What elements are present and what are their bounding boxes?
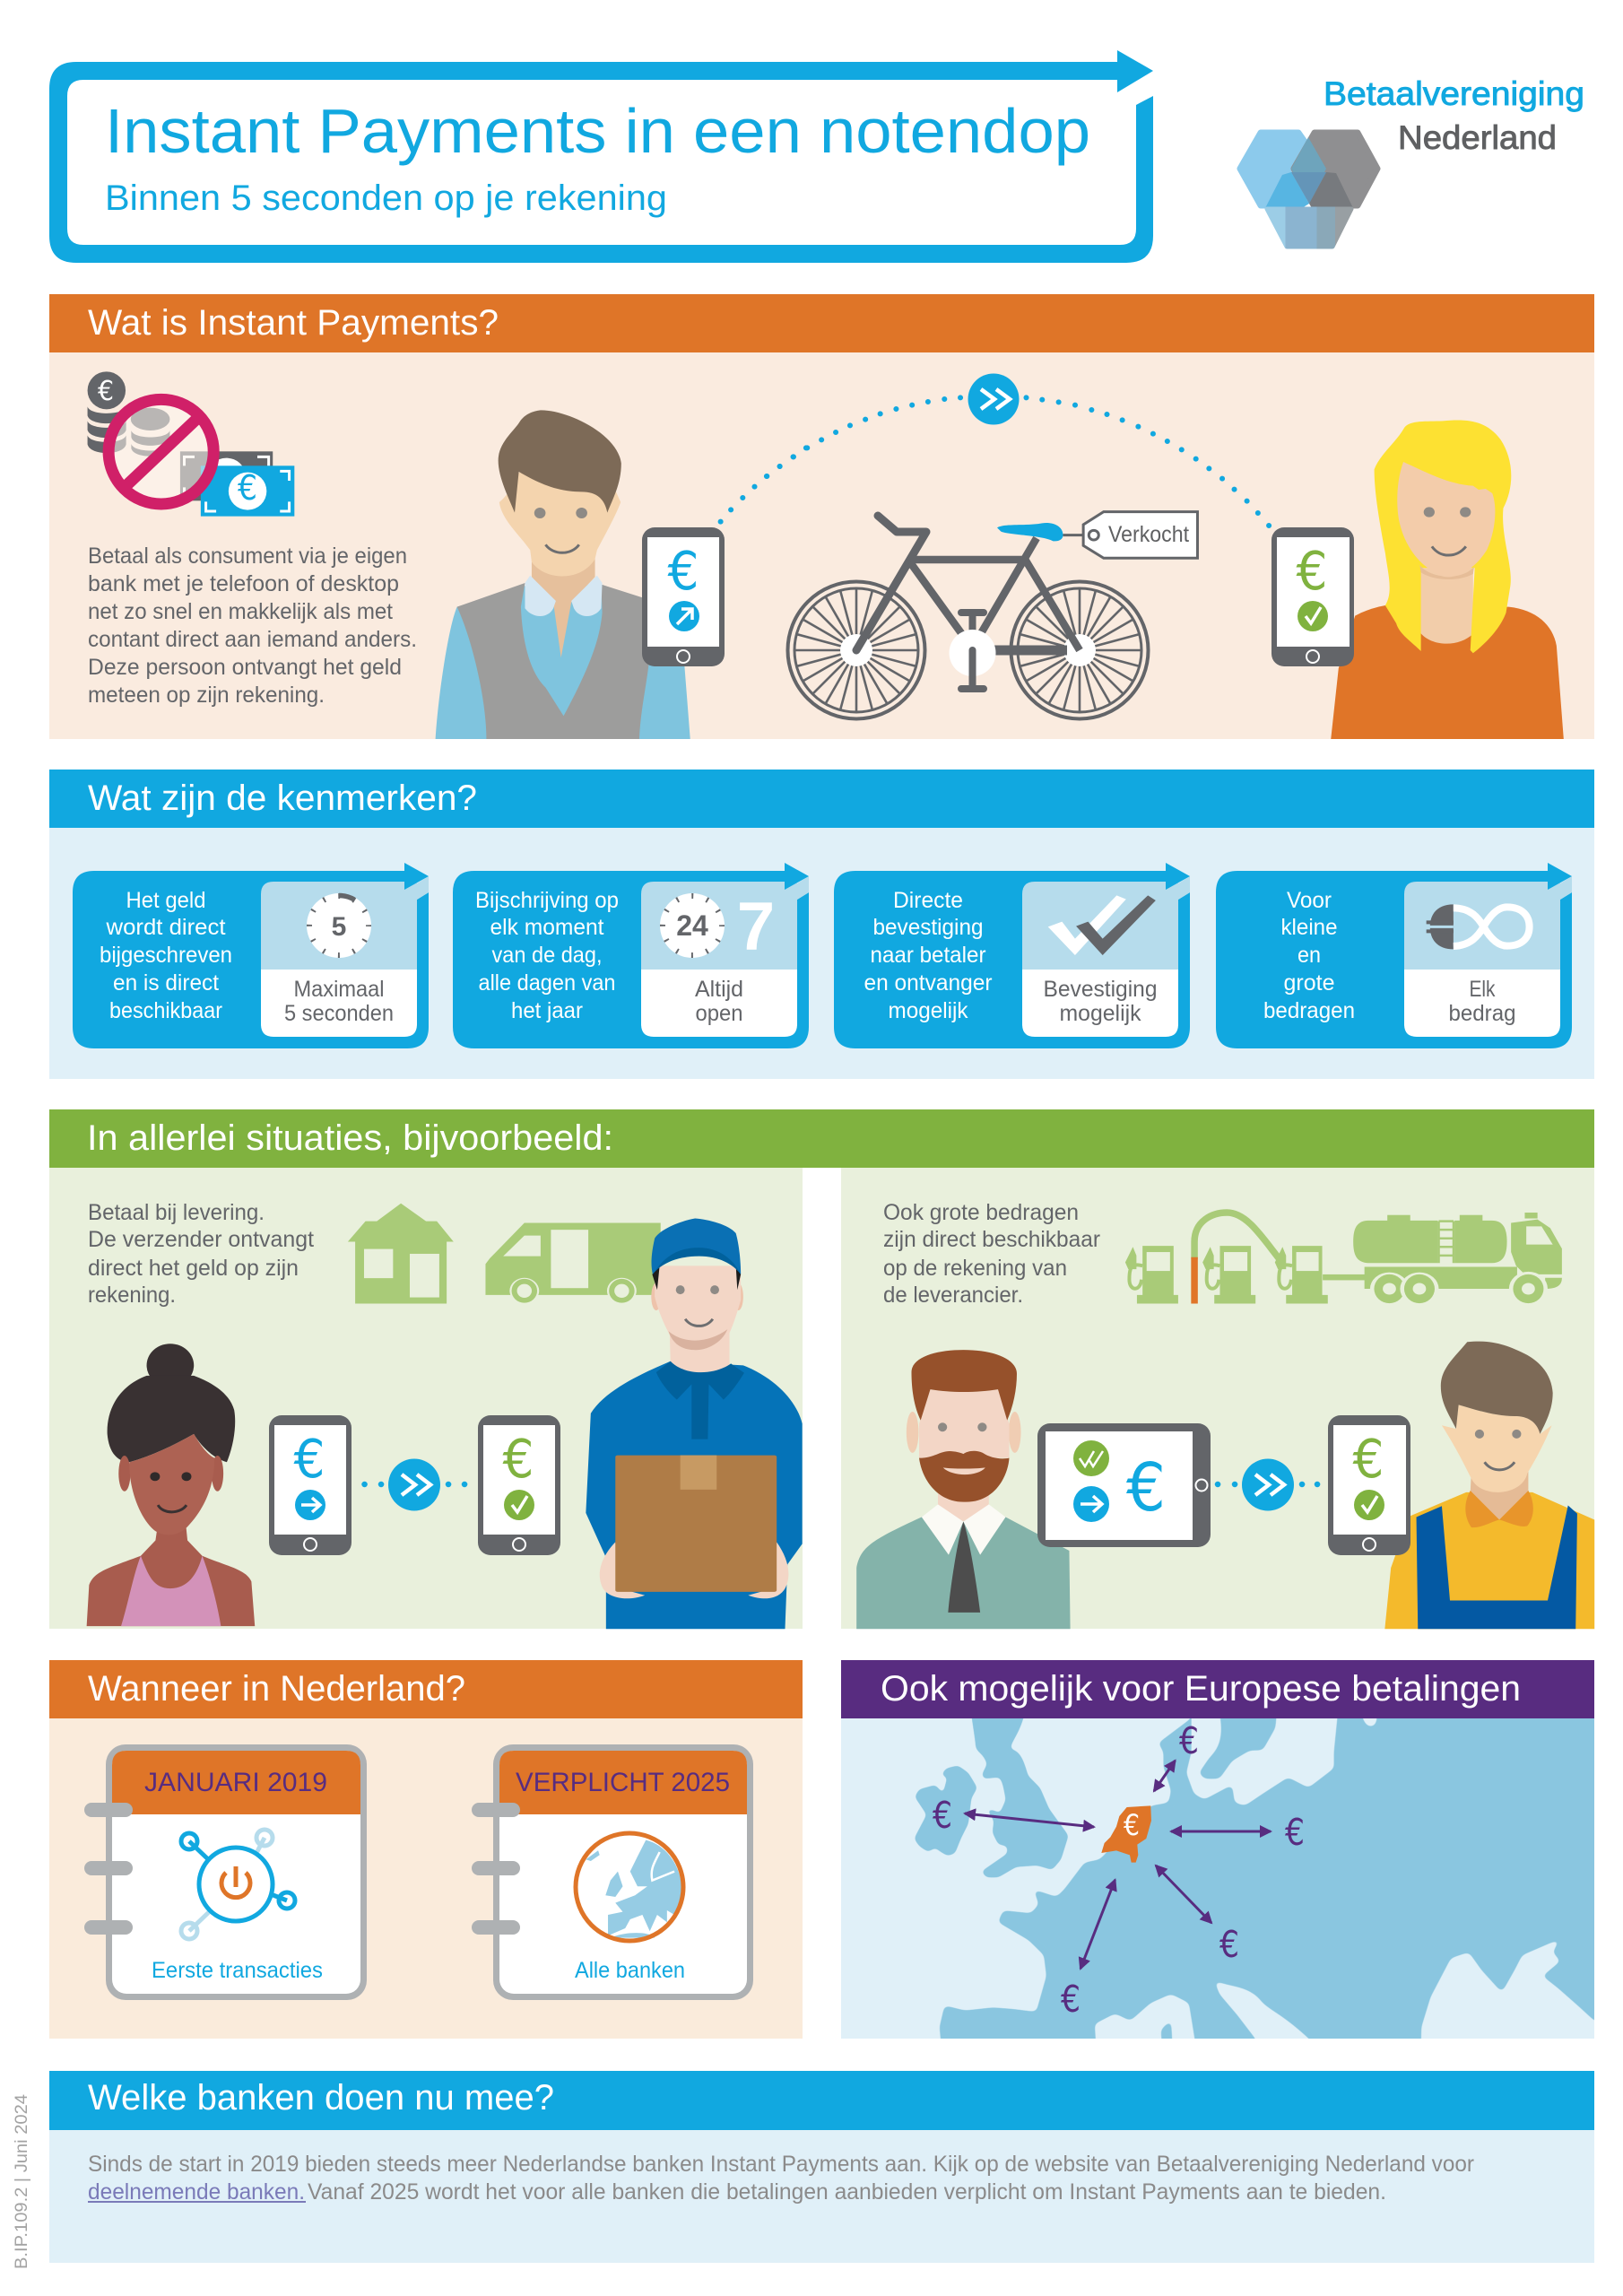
text block: levering: De verzender ontvangt [88,1227,314,1252]
text block: banks: deelnemende banken. [88,2179,305,2205]
card: altijd open: elk moment [490,915,604,940]
panel: betaal bij levering [49,1168,803,1629]
text block: intro: bank met je telefoon of desktop [88,571,399,596]
title banner [49,50,1153,263]
phone: customer [269,1415,352,1555]
heading: In allerlei situaties [49,1109,1594,1168]
card: elk bedrag: kleine [1280,915,1338,940]
card: altijd open: open [696,1001,742,1026]
text block: grote bedragen: zijn direct beschikbaar [883,1227,1100,1252]
phone: receiver: € [1297,540,1327,602]
card: bevestiging mogelijk: en ontvanger [864,970,992,996]
text block: intro: Deze persoon ontvangt het geld [88,655,402,680]
panel: grote bedragen [841,1168,1594,1629]
icon: fuel pumps [1125,1213,1328,1303]
euro symbols on map [933,1719,1305,2021]
card: elk bedrag: grote [1284,970,1334,996]
icon: power network [181,1830,295,1939]
phone: sender [642,527,725,666]
phone: worker [1328,1415,1410,1555]
heading [49,294,1594,352]
card: elk bedrag: bedragen [1263,998,1355,1023]
icon: clock 24/7 [660,889,775,965]
card: bevestiging mogelijk: Directe [893,888,963,913]
icon: no cash: € [238,468,257,508]
title: Instant Payments in een notendop [105,96,1090,166]
heading: Wanneer in Nederland? [88,1669,465,1709]
heading: In allerlei situaties: In allerlei situaties, bijvoorbeeld: [87,1118,613,1158]
card: altijd open [453,863,809,1048]
heading: Welke banken doen nu mee? [88,2078,554,2118]
card: bevestiging mogelijk: mogelijk [1060,1001,1141,1026]
card: altijd open: Bijschrijving op [475,888,619,913]
card: maximaal 5 seconden: wordt direct [105,915,226,940]
price tag [1063,512,1197,558]
panel: Europese betalingen [841,1660,1594,2039]
card: altijd open: van de dag, [491,943,603,968]
card: maximaal 5 seconden: 5 seconden [284,1001,394,1026]
text block: intro: contant direct aan iemand anders. [88,627,417,652]
document reference: B.IP.109.2 | Juni 2024 [13,2094,31,2269]
card: elk bedrag: Elk [1469,977,1496,1002]
arrow: transfer [364,1458,464,1510]
text block: levering: rekening. [88,1283,176,1308]
phone: worker: € [1352,1428,1384,1490]
figure: woman [1331,421,1564,739]
icon: van [485,1223,661,1304]
card: elk bedrag: Voor [1287,888,1332,913]
text block: banks [88,2152,1474,2205]
text block: grote bedragen: Ook grote bedragen [883,1200,1079,1225]
calendar: verplicht 2025 [472,1744,753,2000]
price tag: Verkocht [1108,522,1189,547]
text block: levering [88,1200,314,1308]
panel: Welke banken doen nu mee [49,2071,1594,2263]
text block: grote bedragen: op de rekening van [883,1256,1067,1281]
heading [49,770,1594,828]
icon: bicycle [787,512,1197,719]
icon: house [348,1204,454,1303]
heading: Wat zijn de kenmerken? [88,778,477,818]
card: maximaal 5 seconden: Maximaal [294,977,384,1002]
icon: double check [1048,895,1156,955]
card: maximaal 5 seconden: Het geld [126,888,206,913]
text block: grote bedragen: de leverancier. [883,1283,1023,1308]
euro symbols on map: € [1179,1719,1199,1762]
text block: intro [88,544,417,708]
card: bevestiging mogelijk [834,863,1190,1048]
icon: no cash [88,371,294,517]
text block: banks: Vanaf 2025 wordt het voor alle banken die betalingen aanbieden verplicht om Instant Payments aan te bieden. [308,2179,1386,2205]
icon: clock 24/7: 24 [676,909,708,942]
phone: sender: € [667,540,699,602]
phone: receiver [1271,527,1354,666]
heading [49,1660,803,1718]
arrows: payments from the Netherlands [965,1761,1271,1969]
phone: customer: € [294,1428,325,1490]
euro symbols on map: € [933,1794,952,1837]
icon: timer 5: 5 [332,912,346,942]
icon: euro infinity [1427,904,1530,949]
card: bevestiging mogelijk: Bevestiging [1044,977,1157,1002]
card: bevestiging mogelijk: mogelijk [888,998,968,1023]
text block: grote bedragen [883,1200,1100,1308]
euro symbols on map: € [1124,1808,1140,1842]
heading: Ook mogelijk voor Europese betalingen [881,1669,1521,1709]
text block: intro: Betaal als consument via je eigen [88,544,407,569]
euro symbols on map: € [1061,1978,1081,2021]
phone: courier: € [502,1428,534,1490]
icon: timer 5 [307,893,371,958]
text block: intro: meteen op zijn rekening. [88,683,325,708]
card: elk bedrag: en [1298,943,1321,968]
card: bevestiging mogelijk: bevestiging [873,915,983,940]
heading: Wat is Instant Payments? [88,303,499,343]
tablet: payer: € [1126,1449,1166,1526]
heading [49,2071,1594,2130]
panel background [49,828,1594,1079]
phone: courier [478,1415,560,1555]
calendar: verplicht 2025: Alle banken [575,1958,685,1983]
logo: Betaalvereniging Nederland: Betaalvereniging [1324,75,1584,112]
card: altijd open: Altijd [695,977,743,1002]
card: elk bedrag [1216,863,1572,1048]
text block: levering: Betaal bij levering. [88,1200,265,1225]
tablet: payer [1037,1423,1211,1547]
figure: delivery man [586,1219,803,1629]
text block: intro: net zo snel en makkelijk als met [88,599,393,624]
figure: woman with bun [87,1344,255,1626]
logo: Betaalvereniging Nederland [1240,75,1584,247]
figure: bearded man [856,1350,1071,1629]
icon: clock 24/7: 7 [737,889,775,965]
package [615,1456,777,1592]
calendar: januari 2019: JANUARI 2019 [144,1768,327,1797]
calendar: januari 2019: Eerste transacties [152,1958,323,1983]
subtitle: Binnen 5 seconden op je rekening [105,178,667,218]
card: maximaal 5 seconden: en is direct [113,970,219,996]
text block: banks: Sinds de start in 2019 bieden steeds meer Nederlandse banken Instant Payments aan. Kijk op de website van Betaalvereniging Nederland voor [88,2152,1474,2177]
card: altijd open: het jaar [511,998,583,1023]
panel: Wat is Instant Payments [49,294,1594,739]
logo: Betaalvereniging Nederland: Nederland [1398,119,1557,156]
card: altijd open: alle dagen van [479,970,615,996]
heading [841,1660,1594,1718]
card: elk bedrag: bedrag [1449,1001,1515,1026]
icon: no cash: € [98,376,114,407]
card: maximaal 5 seconden [73,863,429,1048]
euro symbols on map: € [1219,1923,1239,1966]
map: Great Britain and Ireland [914,1707,1151,1877]
panel background [49,352,1594,739]
card: maximaal 5 seconden: bijgeschreven [100,943,232,968]
map: Europe [841,1718,1594,2039]
arrow: dotted arc [721,373,1269,526]
euro symbols on map: € [1285,1811,1305,1854]
figure: worker [1384,1342,1594,1629]
card: maximaal 5 seconden: beschikbaar [109,998,222,1023]
panel: Wanneer in Nederland [49,1660,803,2039]
icon: Europe globe [576,1833,683,1941]
text block: levering: direct het geld op zijn [88,1256,299,1281]
card: bevestiging mogelijk: naar betaler [870,943,986,968]
icon: tanker truck [1323,1213,1562,1306]
arrow: transfer [1218,1458,1317,1510]
map: Netherlands [1101,1805,1151,1863]
calendar: verplicht 2025: VERPLICHT 2025 [516,1768,730,1797]
figure: man [436,410,690,739]
panel: Wat zijn de kenmerken [49,770,1594,1079]
calendar: januari 2019 [84,1744,367,2000]
